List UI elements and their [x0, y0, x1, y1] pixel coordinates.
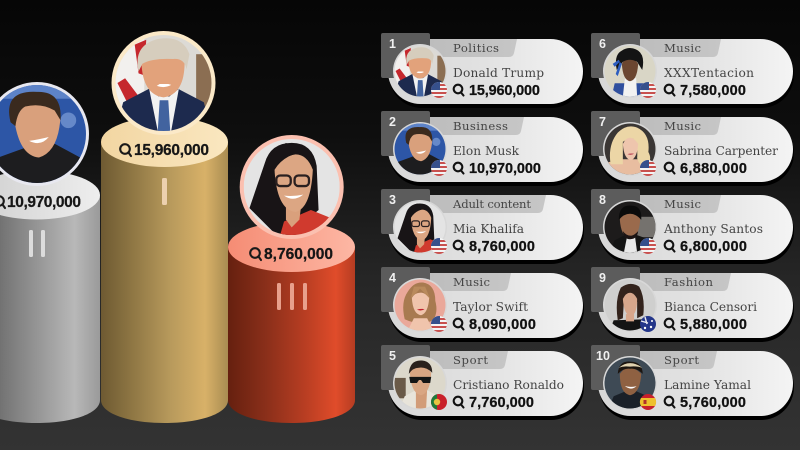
rank number 1: 1 [389, 37, 396, 51]
rank number 2: 2 [389, 115, 396, 129]
panel: ranking card 3 [381, 189, 584, 264]
panel: ranking card 10 [591, 345, 794, 420]
name: XXXTentacion [664, 66, 754, 80]
name: Mia Khalifa [453, 222, 524, 236]
panel: cylinder chart [0, 31, 355, 423]
value: 5,880,000 [680, 317, 747, 333]
category: Fashion [664, 275, 714, 289]
category: Sport [453, 353, 488, 367]
portrait: Elon Musk large [0, 82, 89, 186]
portrait: Cristiano Ronaldo [393, 356, 447, 410]
name: Cristiano Ronaldo [453, 378, 564, 392]
portrait: Bianca Censori [603, 278, 657, 332]
name: Lamine Yamal [664, 378, 751, 392]
flag: USA [431, 160, 447, 176]
portrait: Elon Musk [393, 122, 447, 176]
flag: USA [640, 238, 656, 254]
rank number 6: 6 [599, 37, 606, 51]
rank number 9: 9 [599, 271, 606, 285]
rank number 7: 7 [599, 115, 606, 129]
portrait: Donald Trump [393, 44, 447, 98]
rank number 10: 10 [596, 349, 610, 363]
panel: ranking card 7 [591, 111, 794, 186]
flag: USA [431, 316, 447, 332]
value: 10,970,000 [469, 161, 541, 177]
panel: ranking card 6 [591, 33, 794, 108]
value: 8,760,000 [469, 239, 535, 255]
value: 7,760,000 [469, 395, 534, 411]
rank number 8: 8 [599, 193, 606, 207]
portrait: Lamine Yamal [603, 356, 657, 410]
value: 6,880,000 [680, 161, 747, 177]
portrait: Mia Khalifa large [240, 135, 344, 239]
value: 7,580,000 [680, 83, 746, 99]
cylinder: Mia Khalifa red column [228, 135, 355, 423]
flag: USA [640, 160, 656, 176]
portrait: Taylor Swift [393, 278, 447, 332]
name: Anthony Santos [663, 222, 763, 236]
portrait: Donald Trump large [112, 31, 216, 135]
category: Politics [453, 41, 499, 55]
rank number 4: 4 [389, 271, 396, 285]
rank number 5: 5 [389, 349, 396, 363]
category: Music [664, 197, 701, 211]
panel: ranking card 4 [381, 267, 584, 342]
flag: USA [431, 82, 447, 98]
value: 15,960,000: 15,960,000 [134, 142, 209, 159]
cylinder: Elon Musk silver column [0, 82, 100, 423]
category: Sport [664, 353, 699, 367]
flag: Spain [640, 394, 656, 410]
portrait: Mia Khalifa [393, 200, 447, 254]
name: Sabrina Carpenter [664, 144, 778, 158]
name: Donald Trump [453, 66, 544, 80]
panel: ranking card 8 [591, 189, 794, 264]
name: Elon Musk [453, 144, 520, 158]
rank number 3: 3 [389, 193, 396, 207]
category: Adult content [452, 197, 531, 211]
name: Bianca Censori [664, 300, 757, 314]
panel: ranking card 5 [381, 345, 584, 420]
panel: ranking card 9 [591, 267, 794, 342]
name: Taylor Swift [453, 300, 528, 314]
category: Business [453, 119, 508, 133]
category: Music [664, 41, 701, 55]
flag: Australia [640, 316, 656, 332]
value: 8,760,000: 8,760,000 [264, 246, 333, 263]
panel: ranking card 2 [381, 111, 584, 186]
value: 6,800,000 [680, 239, 747, 255]
portrait: Anthony Santos [603, 200, 657, 254]
category: Music [664, 119, 701, 133]
value: 15,960,000 [469, 83, 540, 99]
portrait: Sabrina Carpenter [603, 122, 657, 176]
cylinder: Donald Trump gold column [101, 31, 228, 423]
value: 10,970,000: 10,970,000 [7, 194, 81, 211]
panel: ranking card 1 [381, 33, 584, 108]
value: 5,760,000 [680, 395, 746, 411]
category: Music [453, 275, 490, 289]
flag: Portugal [431, 394, 447, 410]
value: 8,090,000 [469, 317, 536, 333]
flag: USA [431, 238, 447, 254]
flag: USA [640, 82, 656, 98]
portrait: XXXTentacion [603, 44, 657, 98]
